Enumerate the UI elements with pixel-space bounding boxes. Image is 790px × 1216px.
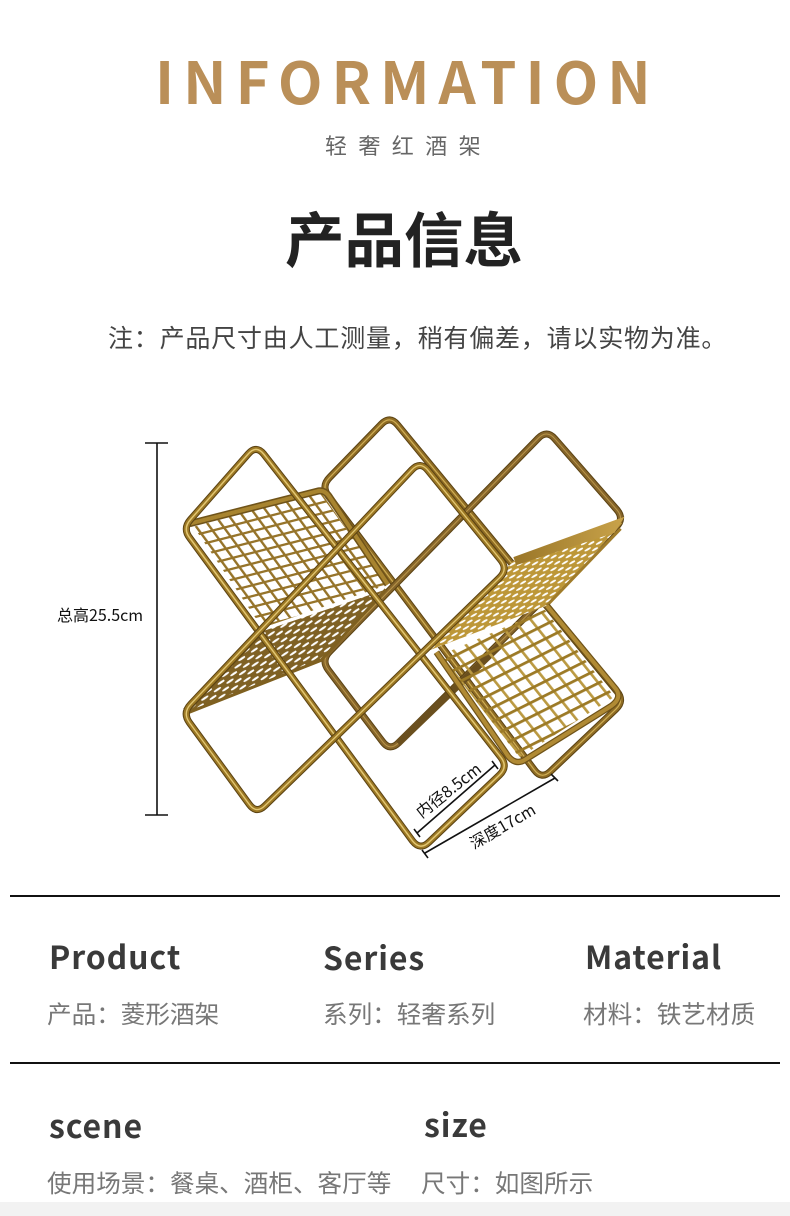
spec: material: Material (585, 933, 722, 979)
dimension: inner diameter line (414, 761, 498, 837)
spec: series: 系列：轻奢系列 (323, 995, 495, 1031)
spec: material: 材料：铁艺材质 (583, 995, 755, 1031)
spec: material (583, 933, 755, 1031)
spec: size: 尺寸：如图所示 (421, 1164, 593, 1200)
product illustration: gold wine rack with dimensions (57, 416, 625, 858)
title: INFORMATION: INFORMATION (155, 37, 660, 121)
back frame: wire loops (325, 420, 621, 775)
bottom strip (0, 1202, 790, 1216)
spec: size (421, 1101, 593, 1200)
spec: product: 产品：菱形酒架 (47, 995, 219, 1031)
heading: product information: 产品信息 (285, 194, 523, 280)
spec: scene (47, 1102, 391, 1200)
spec: product (47, 933, 219, 1031)
mesh shelf: upper left grid (190, 491, 388, 628)
mesh shelf: lower left diamond (185, 589, 386, 713)
label: depth: 深度17cm (464, 797, 540, 854)
note text: 注：产品尺寸由人工测量，稍有偏差，请以实物为准。 (108, 319, 727, 355)
mesh shelf: upper right diamond (424, 517, 625, 652)
mesh shelf: lower right grid (436, 606, 618, 762)
spec: scene: scene (49, 1102, 143, 1148)
spec: scene: 使用场景：餐桌、酒柜、客厅等 (47, 1164, 391, 1200)
spec: product: Product (49, 933, 181, 979)
dimension: total height (145, 443, 168, 815)
dark back bar behind lower right mesh (398, 644, 501, 743)
spec: series: Series (323, 934, 425, 980)
spec: series (323, 934, 495, 1031)
wine rack (185, 420, 625, 846)
dimension: depth line (422, 774, 558, 858)
label: inner diameter: 内径8.5cm (410, 756, 486, 823)
label: total height: 总高25.5cm (57, 602, 143, 626)
subtitle: product name: 轻奢红酒架 (325, 129, 492, 161)
front frame: wire loops (186, 449, 504, 846)
spec: size: size (424, 1101, 488, 1147)
